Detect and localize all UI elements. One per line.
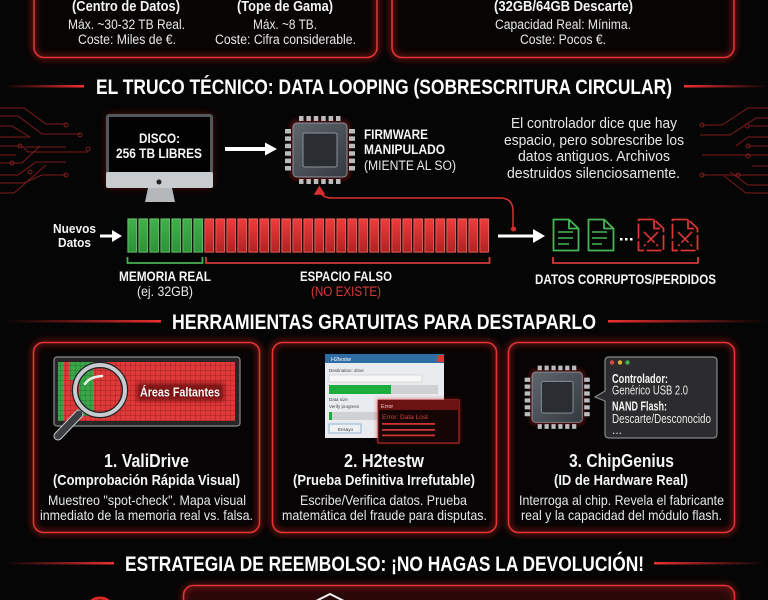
icon: ellipsis	[620, 238, 632, 240]
bracket: real memory	[128, 257, 202, 263]
text: H2testw subtitle: (Prueba Definitiva Irrefutable)	[293, 472, 475, 489]
panel: top left comparison	[34, 0, 377, 58]
arrow: new data into memory	[100, 230, 122, 242]
illustration: H2testw window: Verify progress	[329, 404, 360, 409]
text: corrupted data label: DATOS CORRUPTOS/PERDIDOS	[535, 272, 716, 287]
label: new data: Datos	[58, 236, 91, 250]
chart: memory map	[54, 357, 240, 426]
text: scrap flash: Capacidad Real: Mínima.	[495, 17, 631, 32]
arrow: monitor to firmware	[225, 142, 277, 156]
panel: H2testw	[272, 342, 496, 532]
icon: monitor showing fake capacity: DISCO:	[139, 130, 180, 146]
text: high end drive	[215, 0, 356, 47]
text: manipulated firmware label: (MIENTE AL SO)	[364, 158, 456, 173]
panel: ValiDrive	[34, 342, 260, 532]
text: controller explanation: datos antiguos. Archivos	[518, 148, 670, 165]
text: H2testw title: 2. H2testw	[344, 450, 425, 471]
icon: shield outline	[316, 594, 344, 600]
chart: real memory segments	[127, 218, 204, 253]
text: ValiDrive description: Muestreo "spot-check". Mapa visual	[48, 493, 246, 508]
text: manipulated firmware label: MANIPULADO	[364, 142, 445, 157]
text: data center drive: Máx. ~30-32 TB Real.	[68, 17, 185, 32]
text: controller explanation	[504, 115, 684, 182]
panel: top right comparison	[392, 0, 734, 58]
chart: fake space segments	[204, 218, 490, 253]
panel: ChipGenius	[508, 342, 734, 532]
illustration: H2testw window: H2testw	[331, 357, 351, 363]
icon: intact green file	[554, 220, 578, 250]
text: high end drive: Coste: Cifra considerable.	[215, 32, 356, 47]
arrow: red loop back to firmware	[315, 187, 515, 231]
text: controller explanation: El controlador dice que hay	[511, 115, 677, 132]
illustration: error dialog	[377, 399, 460, 443]
text: real memory label: (ej. 32GB)	[137, 284, 193, 299]
icon: red alert circle top	[86, 598, 114, 600]
text: real memory label	[119, 269, 211, 299]
text: scrap flash: Coste: Pocos €.	[520, 32, 606, 47]
decoration: left circuit traces	[0, 108, 90, 193]
illustration: H2testw window: Ensayo	[338, 427, 354, 432]
icon: intact green file two	[588, 220, 614, 250]
text: ValiDrive description	[40, 493, 253, 523]
illustration: error dialog: Error: Data Lost	[382, 414, 428, 421]
arrow: memory to files	[498, 229, 545, 243]
bracket: fake space	[206, 257, 490, 263]
panel: refund strategy	[184, 586, 734, 600]
text: fake space label	[300, 269, 392, 299]
illustration: info bubble: NAND Flash:	[612, 400, 667, 414]
text: ChipGenius subtitle: (ID de Hardware Real)	[554, 472, 688, 489]
text: manipulated firmware label	[364, 127, 456, 173]
icon: corrupted file one	[638, 220, 664, 250]
illustration: info bubble	[595, 357, 717, 438]
icon: chip	[525, 366, 590, 429]
illustration: info bubble: Genérico USB 2.0	[612, 384, 688, 398]
text: fake space label: ESPACIO FALSO	[300, 269, 392, 284]
heading: free tools: HERRAMIENTAS GRATUITAS PARA DESTAPARLO	[172, 311, 596, 334]
label: new data: Nuevos	[53, 222, 96, 236]
text: ChipGenius title: 3. ChipGenius	[569, 450, 674, 471]
text: H2testw description: matemática del fraude para disputas.	[282, 508, 487, 523]
text: data center drive	[68, 0, 185, 47]
illustration: H2testw window	[325, 354, 444, 438]
text: H2testw description	[282, 493, 487, 523]
text: ValiDrive subtitle: (Comprobación Rápida Visual)	[53, 472, 240, 489]
icon: magnifier	[58, 365, 125, 436]
icon: corrupted file two	[672, 220, 698, 250]
text: controller explanation: destruidos silenciosamente.	[507, 165, 680, 182]
illustration: info bubble: ...	[612, 423, 622, 437]
label: missing areas: Áreas Faltantes	[140, 384, 220, 400]
bracket: files	[553, 257, 698, 263]
text: real memory label: MEMORIA REAL	[119, 269, 211, 284]
icon: monitor showing fake capacity: 256 TB LIBRES	[116, 145, 202, 161]
text: ChipGenius description: Interroga al chip. Revela el fabricante	[519, 493, 724, 508]
illustration: info bubble: Controlador:	[612, 372, 668, 386]
illustration: H2testw window: Destination: drive	[329, 368, 364, 373]
illustration: H2testw window: Data size	[329, 397, 348, 402]
text: H2testw description: Escribe/Verifica datos. Prueba	[300, 493, 467, 508]
illustration: error dialog: Error	[381, 404, 393, 410]
decoration: right circuit traces	[700, 108, 768, 193]
text: ValiDrive description: inmediato de la memoria real vs. falsa.	[40, 508, 253, 523]
text: ChipGenius description	[519, 493, 724, 523]
text: scrap flash	[494, 0, 633, 47]
text: ChipGenius description: real y la capacidad del módulo flash.	[521, 508, 722, 523]
text: ValiDrive title: 1. ValiDrive	[104, 450, 189, 471]
text: fake space label: (NO EXISTE)	[311, 284, 381, 299]
text: high end drive: Máx. ~8 TB.	[253, 17, 317, 32]
text: data center drive: Coste: Miles de €.	[78, 32, 176, 47]
icon: firmware chip	[285, 116, 355, 184]
heading: refund strategy: ESTRATEGIA DE REEMBOLSO: ¡NO HAGAS LA DEVOLUCIÓN!	[125, 552, 644, 576]
text: controller explanation: espacio, pero sobrescribe los	[504, 132, 684, 149]
text: manipulated firmware label: FIRMWARE	[364, 127, 428, 142]
icon: monitor showing fake capacity	[106, 114, 213, 202]
illustration: info bubble: Descarte/Desconocido	[612, 412, 711, 426]
label: new data	[53, 222, 96, 250]
